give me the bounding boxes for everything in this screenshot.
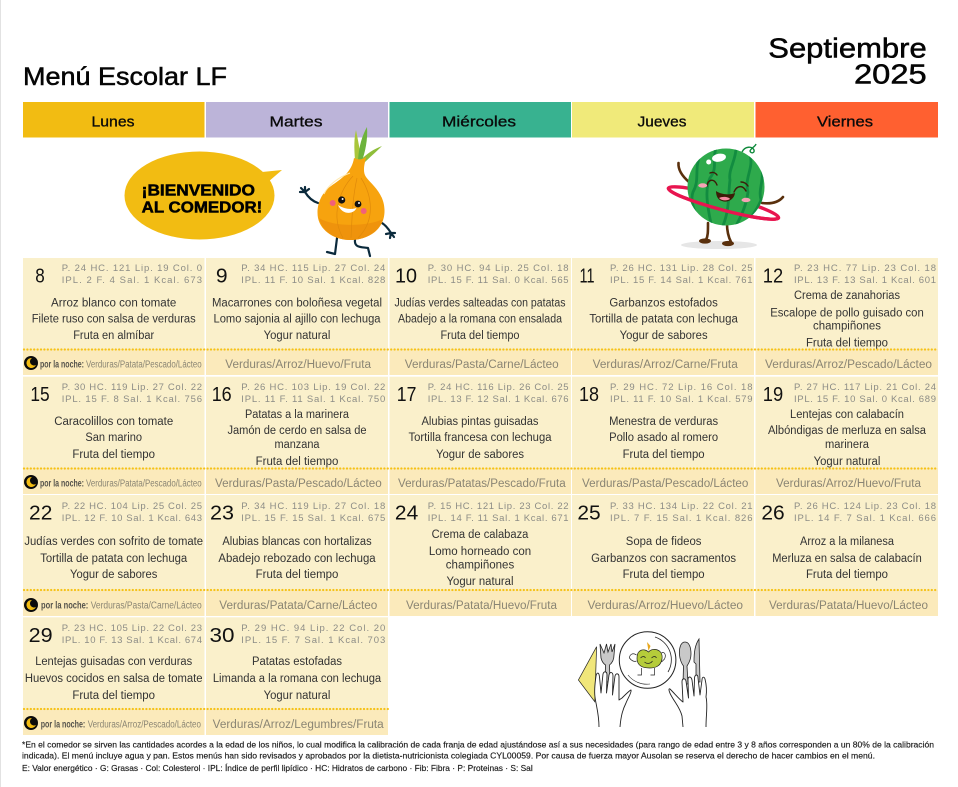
day 8: P. 24 HC. 121 Lip. 19 Col. 0 <box>62 263 202 274</box>
speech bubble: welcome: AL COMEDOR! <box>142 199 262 216</box>
day 9 <box>206 258 388 375</box>
title: Menú Escolar LF <box>23 63 227 91</box>
heading: month and year: Septiembre <box>768 32 927 63</box>
day 10: Fruta del tiempo <box>440 330 520 342</box>
speech bubble: welcome: ¡BIENVENIDO <box>142 183 255 200</box>
day 12: Verduras/Arroz/Pescado/Lácteo <box>765 359 932 371</box>
day 18: Menestra de verduras <box>609 416 718 428</box>
speech bubble: welcome <box>124 152 282 240</box>
day 16: Verduras/Pasta/Pescado/Lácteo <box>215 478 382 490</box>
day 15: Fruta del tiempo <box>72 449 155 461</box>
day 15: Caracolillos con tomate <box>54 416 173 428</box>
day 26: Verduras/Patata/Huevo/Lácteo <box>769 600 928 612</box>
day 25: P. 33 HC. 134 Lip. 22 Col. 21 <box>610 501 752 512</box>
day 22: 22 <box>29 501 52 524</box>
footnote <box>22 739 934 773</box>
day 11: 11 <box>580 264 594 287</box>
day 11: Tortilla de patata con lechuga <box>589 314 738 326</box>
day 10: P. 30 HC. 94 Lip. 25 Col. 18 <box>428 263 569 274</box>
day 9: Macarrones con boloñesa vegetal <box>212 298 382 310</box>
week 3 <box>23 495 938 616</box>
day 17 <box>390 377 571 494</box>
day 25 <box>572 495 754 616</box>
day 30: Patatas estofadas <box>252 656 342 668</box>
day 23 <box>206 495 388 616</box>
day 19: Verduras/Arroz/Huevo/Fruta <box>776 478 922 490</box>
day 11: Yogur de sabores <box>620 330 708 342</box>
week 2 <box>23 377 938 494</box>
day 17: Yogur de sabores <box>436 449 524 461</box>
day 9: Verduras/Arroz/Huevo/Fruta <box>225 359 372 371</box>
day 29: Huevos cocidos en salsa de tomate <box>25 673 203 685</box>
header: Viernes <box>756 102 938 138</box>
day 23: Alubias blancas con hortalizas <box>222 536 372 548</box>
day 8: Verduras/Patata/Pescado/Lácteo <box>86 360 202 370</box>
day 15: IPL. 15 F. 8 Sal. 1 Kcal. 756 <box>62 394 202 405</box>
day 15: 15 <box>30 383 50 406</box>
day 24: Yogur natural <box>446 576 514 588</box>
day 30: IPL. 15 F. 7 Sal. 1 Kcal. 703 <box>241 635 385 646</box>
day 15: P. 30 HC. 119 Lip. 27 Col. 22 <box>62 382 202 393</box>
day 10: IPL. 15 F. 11 Sal. 0 Kcal. 565 <box>428 275 569 286</box>
day 25: Sopa de fideos <box>626 536 702 548</box>
day 16: manzana <box>274 439 320 451</box>
day 17: 17 <box>397 383 416 406</box>
day 19: P. 27 HC. 117 Lip. 21 Col. 24 <box>794 382 936 393</box>
day 16: Fruta del tiempo <box>256 456 338 468</box>
day 18: IPL. 11 F. 10 Sal. 1 Kcal. 579 <box>610 394 752 405</box>
day 8: Fruta en almíbar <box>73 330 154 342</box>
day 16 <box>206 377 388 494</box>
day 8: por la noche: <box>40 360 84 370</box>
day 11: IPL. 15 F. 14 Sal. 1 Kcal. 761 <box>610 275 752 286</box>
day 9: 9 <box>216 264 228 287</box>
day 12: Crema de zanahorias <box>794 290 900 302</box>
header: Jueves <box>572 102 754 138</box>
day 11: Garbanzos estofados <box>609 298 718 310</box>
header: Martes <box>206 102 388 138</box>
day 25: Fruta del tiempo <box>623 569 705 581</box>
header: Lunes <box>23 102 204 138</box>
day 19: Lentejas con calabacín <box>790 409 904 421</box>
weekday header row <box>23 102 938 138</box>
day 26: IPL. 14 F. 7 Sal. 1 Kcal. 666 <box>794 513 936 524</box>
day 29: Fruta del tiempo <box>72 690 155 702</box>
day 16: P. 26 HC. 103 Lip. 19 Col. 22 <box>241 382 385 393</box>
day 17: Alubias pintas guisadas <box>422 416 539 428</box>
day 29: Lentejas guisadas con verduras <box>35 656 192 668</box>
header: Jueves: Jueves <box>638 115 686 131</box>
header: Miércoles <box>390 102 571 138</box>
day 8 <box>23 258 204 375</box>
day 22: Yogur de sabores <box>70 569 158 581</box>
day 22 <box>23 495 204 616</box>
day 23: IPL. 15 F. 15 Sal. 1 Kcal. 675 <box>241 513 385 524</box>
day 8: 8 <box>35 264 45 287</box>
day 26: 26 <box>761 501 785 524</box>
day 22: Judías verdes con sofrito de tomate <box>24 536 203 548</box>
day 17: IPL. 13 F. 12 Sal. 1 Kcal. 676 <box>428 394 569 405</box>
day 24: Verduras/Patata/Huevo/Fruta <box>406 600 558 612</box>
day 22: IPL. 12 F. 10 Sal. 1 Kcal. 643 <box>62 513 202 524</box>
day 29 <box>23 617 204 735</box>
day 12: champiñones <box>813 320 881 332</box>
day 29: IPL. 10 F. 13 Sal. 1 Kcal. 674 <box>62 635 202 646</box>
day 29: P. 23 HC. 105 Lip. 22 Col. 23 <box>62 623 202 634</box>
week 4 <box>23 617 388 735</box>
day 30: Verduras/Arroz/Legumbres/Fruta <box>213 719 384 731</box>
day 11: P. 26 HC. 131 Lip. 28 Col. 25 <box>610 263 752 274</box>
day 25: IPL. 7 F. 15 Sal. 1 Kcal. 826 <box>610 513 752 524</box>
header: Viernes: Viernes <box>817 115 873 131</box>
day 30: 30 <box>210 624 234 647</box>
day 29: Verduras/Arroz/Pescado/Lácteo <box>88 720 201 730</box>
day 19: Yogur natural <box>814 456 880 468</box>
day 12: Fruta del tiempo <box>806 338 888 350</box>
day 10: Abadejo a la romana con ensalada <box>398 314 563 326</box>
day 10: Verduras/Pasta/Carne/Lácteo <box>405 359 559 371</box>
day 9: Lomo sajonia al ajillo con lechuga <box>214 314 381 326</box>
header: Lunes: Lunes <box>92 115 134 131</box>
day 23: Abadejo rebozado con lechuga <box>218 553 376 565</box>
icon: watermelon with hula hoop <box>667 144 783 249</box>
day 18: P. 29 HC. 72 Lip. 16 Col. 18 <box>610 382 752 393</box>
day 9: P. 34 HC. 115 Lip. 27 Col. 24 <box>241 263 385 274</box>
day 24: IPL. 14 F. 11 Sal. 1 Kcal. 671 <box>428 513 569 524</box>
day 30: Limanda a la romana con lechuga <box>213 673 382 685</box>
day 16: 16 <box>212 383 232 406</box>
day 22: por la noche: <box>41 600 88 612</box>
day 24: 24 <box>395 501 418 524</box>
day 16: IPL. 11 F. 11 Sal. 1 Kcal. 750 <box>241 394 385 405</box>
day 26 <box>756 495 938 616</box>
day 19 <box>756 377 938 494</box>
day 26: Fruta del tiempo <box>806 569 888 581</box>
day 23: Verduras/Patata/Carne/Lácteo <box>219 600 377 612</box>
day 24: Crema de calabaza <box>432 529 529 541</box>
day 17: Tortilla francesa con lechuga <box>408 432 552 444</box>
day 11 <box>572 258 754 375</box>
day 8: IPL. 2 F. 4 Sal. 1 Kcal. 673 <box>62 275 202 286</box>
header: Martes: Martes <box>270 115 322 131</box>
icon: onion character <box>300 127 395 256</box>
day 18 <box>572 377 754 494</box>
footnote: indicada). El menú incluye agua y pan. Estos menús han sido revisados y aprobados por la dietista-nutricionista colegiada CYL00059. Por causa de fuerza mayor Ausolan se reserva el derecho de hacer cambios en el menú. <box>22 750 875 760</box>
day 9: Yogur natural <box>264 330 330 342</box>
day 24: P. 15 HC. 121 Lip. 23 Col. 22 <box>428 501 569 512</box>
header: Miércoles: Miércoles <box>442 115 516 131</box>
day 25: 25 <box>577 501 601 524</box>
day 18: Fruta del tiempo <box>623 449 705 461</box>
day 24: Lomo horneado con <box>429 546 531 558</box>
day 10: 10 <box>395 264 417 287</box>
day 17: Verduras/Patatas/Pescado/Fruta <box>398 478 566 490</box>
day 17: P. 24 HC. 116 Lip. 26 Col. 25 <box>428 382 569 393</box>
week 1 <box>23 258 938 375</box>
day 12: Escalope de pollo guisado con <box>770 308 924 320</box>
day 23: P. 34 HC. 119 Lip. 27 Col. 18 <box>241 501 385 512</box>
footnote: E: Valor energético · G: Grasas · Col: Colesterol · IPL: Índice de perfil lipídico · HC: Hidratos de carbono · Fib: Fibra · P: Proteinas · S: Sal <box>22 763 533 773</box>
day 30: P. 29 HC. 94 Lip. 22 Col. 20 <box>241 623 385 634</box>
heading: month and year <box>768 32 927 89</box>
day 22: P. 22 HC. 104 Lip. 25 Col. 25 <box>62 501 202 512</box>
day 29: por la noche: <box>41 720 85 730</box>
footnote: *En el comedor se sirven las cantidades acordes a la edad de los niños, lo cual modifica la calibración de cada franja de edad ajustándose así a sus necesidades (para rango de edad entre 3 y 8 años corresponden a un 80% de la calibración <box>22 739 934 749</box>
day 10: Judías verdes salteadas con patatas <box>394 298 566 310</box>
heading: month and year: 2025 <box>854 58 927 89</box>
day 18: 18 <box>579 383 599 406</box>
day 25: Garbanzos con sacramentos <box>591 553 736 565</box>
day 16: Jamón de cerdo en salsa de <box>228 425 366 437</box>
day 12: IPL. 13 F. 13 Sal. 1 Kcal. 601 <box>794 275 936 286</box>
day 19: Albóndigas de merluza en salsa <box>768 425 927 437</box>
day 12 <box>756 258 938 375</box>
day 23: 23 <box>210 501 234 524</box>
day 15: Verduras/Patata/Pescado/Lácteo <box>86 478 202 490</box>
day 15 <box>23 377 204 494</box>
day 30 <box>206 617 388 735</box>
day 26: P. 26 HC. 124 Lip. 23 Col. 18 <box>794 501 936 512</box>
day 30: Yogur natural <box>264 690 330 702</box>
day 24 <box>390 495 571 616</box>
icon: plate with apple, cutlery and hands <box>578 632 707 727</box>
day 10 <box>390 258 571 375</box>
day 9: IPL. 11 F. 10 Sal. 1 Kcal. 828 <box>241 275 385 286</box>
day 22: Verduras/Pasta/Carne/Lácteo <box>91 600 202 612</box>
day 26: Merluza en salsa de calabacín <box>772 553 922 565</box>
day 19: IPL. 15 F. 10 Sal. 0 Kcal. 689 <box>794 394 936 405</box>
day 26: Arroz a la milanesa <box>800 536 895 548</box>
day 16: Patatas a la marinera <box>245 409 350 421</box>
day 11: Verduras/Arroz/Carne/Fruta <box>593 359 738 371</box>
day 23: Fruta del tiempo <box>256 569 338 581</box>
day 15: por la noche: <box>40 478 84 490</box>
day 8: Filete ruso con salsa de verduras <box>32 314 196 326</box>
day 19: 19 <box>763 383 783 406</box>
day 19: marinera <box>825 439 870 451</box>
day 15: San marino <box>85 432 142 444</box>
day 8: Arroz blanco con tomate <box>51 298 176 310</box>
day 18: Verduras/Pasta/Pescado/Lácteo <box>582 478 748 490</box>
day 25: Verduras/Arroz/Huevo/Lácteo <box>588 600 743 612</box>
day 29: 29 <box>29 624 53 647</box>
day 12: 12 <box>763 264 783 287</box>
day 22: Tortilla de patata con lechuga <box>40 553 188 565</box>
day 18: Pollo asado al romero <box>609 432 718 444</box>
day 24: champiñones <box>446 560 514 572</box>
day 12: P. 23 HC. 77 Lip. 23 Col. 18 <box>794 263 936 274</box>
